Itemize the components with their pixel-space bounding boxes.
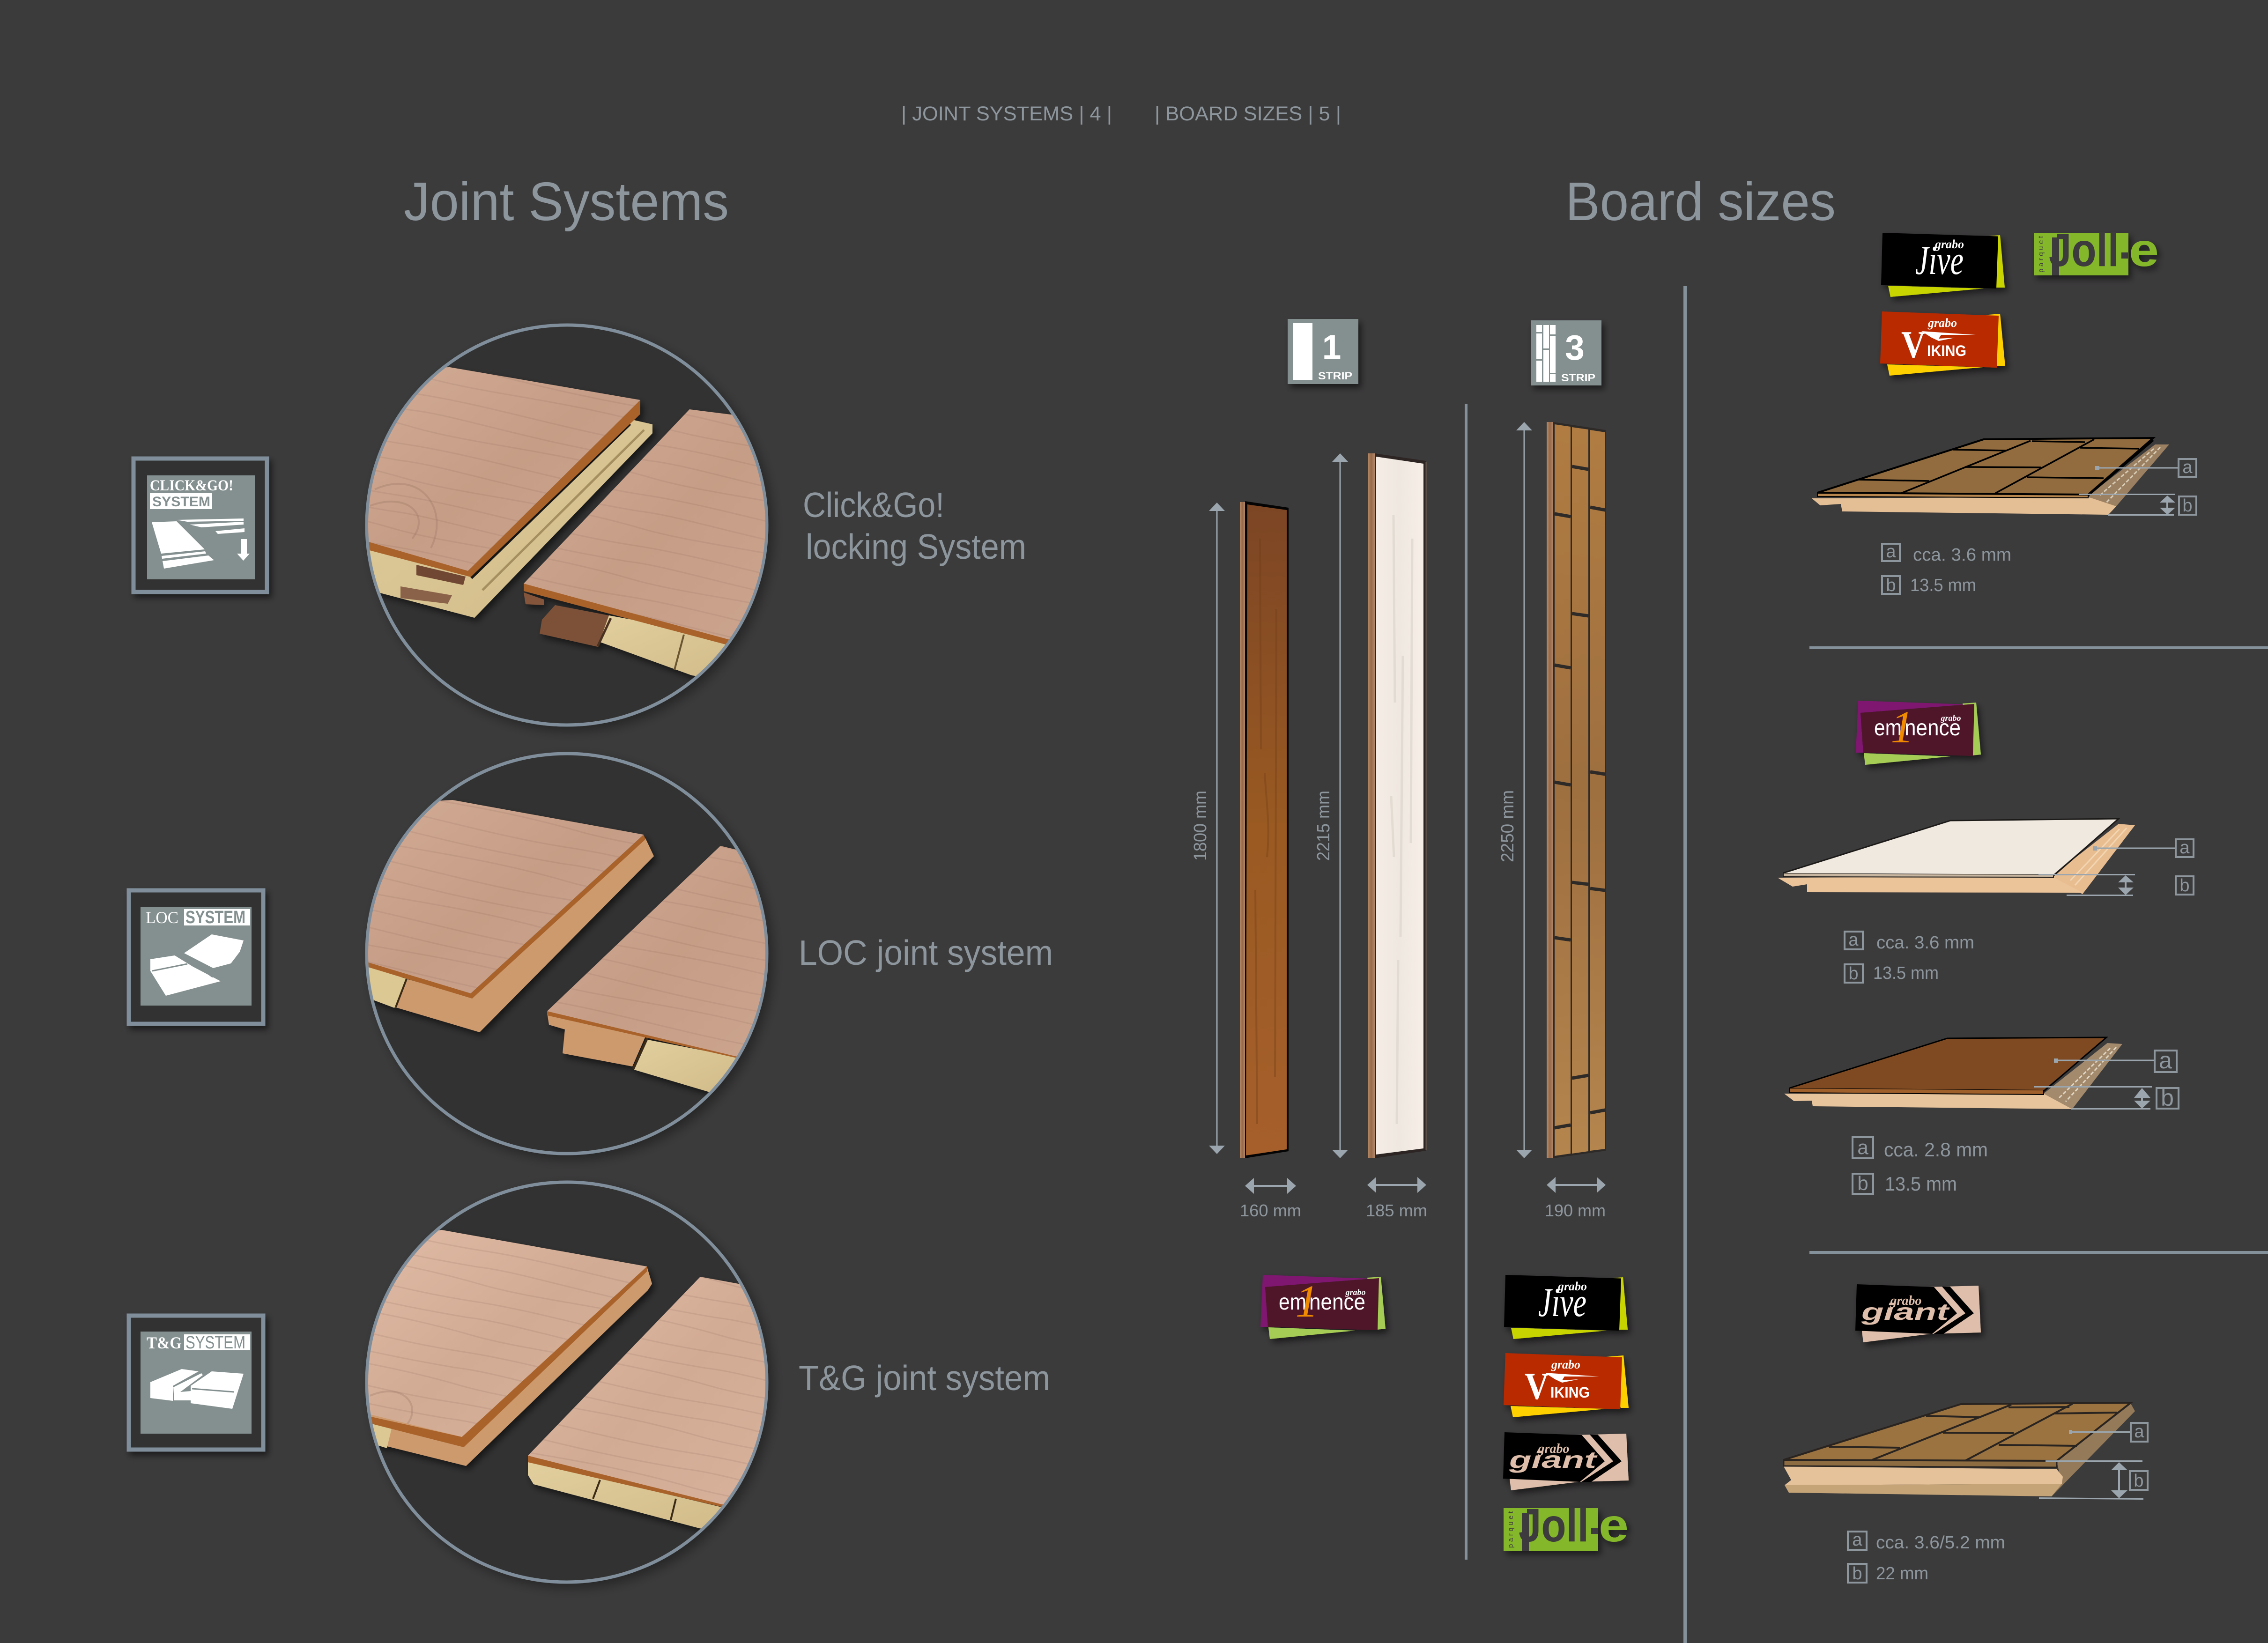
logo: eminence, strip column: 1 <box>1296 1276 1318 1327</box>
logo: Jive, thickness section: Jive <box>1915 238 1964 283</box>
callout a: white board surface: a <box>2179 838 2190 858</box>
logo: eminence, strip column <box>1260 1275 1386 1339</box>
header navigation <box>901 103 1341 125</box>
logo: eminence, strip column: grabo <box>1345 1288 1366 1297</box>
label: 1800 mm: 1800 mm <box>1191 791 1210 861</box>
callout a: dark board surface <box>2054 1047 2177 1073</box>
divider between strip columns <box>1465 404 1468 1560</box>
legend: 3-strip values: a <box>1886 542 1896 562</box>
title: Joint Systems: Joint Systems <box>404 171 729 232</box>
icon: 1 strip: STRIP <box>1318 370 1352 382</box>
label: 2215 mm: 2215 mm <box>1314 791 1334 861</box>
logo: Jive, strip column: Jive <box>1538 1280 1586 1325</box>
circle: LOC joint photo <box>361 754 787 1154</box>
icon: Click&Go system: CLICK&GO! <box>150 477 233 494</box>
label: 2250 mm: 2250 mm <box>1498 790 1518 862</box>
callout a: giant surface <box>2069 1422 2148 1442</box>
logo: jolle, strip column <box>1504 1499 1629 1552</box>
label: Click&Go locking System: locking System <box>806 527 1026 566</box>
legend: 3-strip values: 13.5 mm <box>1910 576 1976 595</box>
callout a: 3-strip surface <box>2095 458 2196 477</box>
arrow: 2250 mm height <box>1516 422 1532 1158</box>
legend: giant values: 22 mm <box>1876 1564 1928 1584</box>
logo: jolle, thickness section: e <box>2129 224 2159 276</box>
legend: dark board values: cca. 2.8 mm <box>1884 1139 1988 1161</box>
logo: eminence, thickness section <box>1856 701 1981 765</box>
legend: giant values: b <box>1852 1564 1862 1584</box>
right board of T&G joint <box>528 1277 787 1536</box>
label: 160 mm: 160 mm <box>1240 1201 1301 1220</box>
logo: Viking, thickness section <box>1880 311 2005 376</box>
left board of T&G joint <box>361 1230 652 1466</box>
callout b: 3-strip thickness: b <box>2182 496 2193 516</box>
logo: jolle, strip column: Joll <box>1519 1499 1589 1552</box>
callout b: 3-strip thickness <box>2079 494 2196 516</box>
logo: jolle, strip column: parquet <box>1507 1511 1515 1548</box>
logo: Viking, strip column <box>1504 1353 1629 1417</box>
header navigation: | BOARD SIZES | 5 | <box>1155 103 1341 125</box>
cross-section board: 3-strip 13.5 mm <box>1812 438 2169 515</box>
callout b: giant thickness <box>2039 1460 2148 1500</box>
legend: white board values: b <box>1848 964 1859 984</box>
logo: Jive, thickness section: grabo <box>1934 237 1964 251</box>
icon: LOC system: SYSTEM <box>185 908 245 927</box>
legend: dark board values: b <box>1857 1172 1868 1194</box>
logo: Jive, thickness section <box>1881 233 2005 297</box>
icon: T&G system: T&G <box>147 1333 182 1352</box>
icon: 3 strip <box>1531 320 1601 385</box>
arrow: 185 mm width <box>1367 1177 1426 1193</box>
board: 185 mm white <box>1368 453 1426 1158</box>
arrow: 160 mm width <box>1245 1178 1296 1194</box>
left board of Click&Go joint <box>361 367 652 618</box>
label: T&G joint system: T&G joint system <box>799 1358 1050 1398</box>
legend: white board values: cca. 3.6 mm <box>1876 933 1974 953</box>
legend: giant values <box>1848 1530 2005 1584</box>
logo: giant, strip column: giant <box>1508 1447 1598 1473</box>
arrow: 190 mm width <box>1547 1177 1606 1193</box>
logo: Viking, thickness section: V <box>1901 323 1926 366</box>
legend: giant values: cca. 3.6/5.2 mm <box>1876 1533 2005 1553</box>
cross-section board: dark 13.5 mm <box>1784 1037 2122 1109</box>
callout b: dark board thickness <box>2034 1085 2179 1111</box>
legend: giant values: a <box>1852 1530 1862 1550</box>
callout b: giant thickness: b <box>2134 1471 2144 1491</box>
left board of LOC joint <box>361 800 654 1032</box>
logo: eminence, thickness section: em <box>1874 716 1902 740</box>
legend: 3-strip values: cca. 3.6 mm <box>1913 545 2011 565</box>
callout a: dark board surface: a <box>2159 1047 2172 1073</box>
label: 185 mm: 185 mm <box>1366 1201 1427 1220</box>
logo: Viking, thickness section: grabo <box>1927 316 1957 330</box>
logo: eminence, strip column: nence <box>1309 1290 1365 1315</box>
icon: LOC system <box>129 890 263 1024</box>
circle: Click&Go joint photo <box>361 325 787 725</box>
logo: Viking, strip column: IKING <box>1550 1384 1590 1401</box>
logo: jolle, thickness section: Joll <box>2049 224 2119 276</box>
logo: giant, thickness section <box>1855 1284 1981 1342</box>
circle: T&G joint photo <box>361 1182 787 1582</box>
label: Click&Go locking System: Click&Go! <box>803 485 944 525</box>
callout a: white board surface <box>2093 838 2194 858</box>
label: Click&Go locking System <box>803 485 1026 566</box>
right board of Click&Go joint <box>524 409 787 684</box>
icon: Click&Go system <box>133 459 267 592</box>
icon: 1 strip <box>1288 319 1358 384</box>
legend: dark board values: 13.5 mm <box>1885 1173 1957 1195</box>
legend: dark board values: a <box>1857 1136 1868 1158</box>
legend: 3-strip values: b <box>1886 576 1896 595</box>
icon: T&G system: SYSTEM <box>185 1333 245 1353</box>
callout b: white board thickness <box>2038 874 2194 896</box>
logo: Viking, thickness section: IKING <box>1927 342 1966 359</box>
header navigation: | JOINT SYSTEMS | 4 | <box>901 103 1112 125</box>
legend: dark board values <box>1853 1136 1988 1195</box>
divider between strip area and thickness area <box>1683 286 1687 1643</box>
legend: white board values: 13.5 mm <box>1873 963 1939 983</box>
callout b: white board thickness: b <box>2179 876 2190 896</box>
icon: Click&Go system: SYSTEM <box>152 494 210 510</box>
logo: jolle, strip column: e <box>1599 1499 1629 1552</box>
logo: eminence, thickness section: 1 <box>1890 702 1914 753</box>
logo: eminence, thickness section: grabo <box>1940 713 1961 723</box>
logo: giant, strip column <box>1503 1432 1629 1490</box>
arrow: 2215 mm height <box>1332 453 1348 1158</box>
legend: white board values: a <box>1848 930 1859 950</box>
icon: LOC system: LOC <box>146 908 178 927</box>
label: 190 mm: 190 mm <box>1545 1201 1606 1220</box>
callout a: giant surface: a <box>2134 1422 2144 1442</box>
logo: Jive, strip column <box>1504 1275 1628 1339</box>
icon: 1 strip: 1 <box>1322 328 1341 366</box>
callout a: 3-strip surface: a <box>2182 458 2193 477</box>
icon: T&G system <box>129 1316 263 1450</box>
board: 190 mm three strip <box>1547 422 1606 1158</box>
logo: jolle, thickness section: parquet <box>2037 236 2045 273</box>
cross-section board: white 13.5 mm <box>1778 819 2135 894</box>
logo: Viking, strip column: V <box>1525 1365 1549 1407</box>
logo: giant, thickness section: giant <box>1860 1299 1950 1325</box>
logo: Jive, strip column: grabo <box>1557 1280 1587 1293</box>
callout b: dark board thickness: b <box>2161 1085 2174 1111</box>
cross-section board: giant 22 mm <box>1784 1403 2135 1496</box>
logo: eminence, thickness section: nence <box>1905 716 1961 740</box>
right board of LOC joint <box>547 846 787 1096</box>
divider: section 2 <box>1809 1251 2268 1254</box>
logo: giant, thickness section: grabo <box>1890 1294 1921 1308</box>
logo: giant, strip column: grabo <box>1538 1442 1569 1456</box>
logo: Viking, strip column: grabo <box>1551 1358 1580 1371</box>
legend: 3-strip values <box>1882 542 2011 595</box>
logo: jolle, thickness section <box>2034 224 2159 276</box>
logo: eminence, strip column: em <box>1279 1290 1306 1315</box>
label: LOC joint system: LOC joint system <box>799 933 1053 972</box>
icon: 3 strip: 3 <box>1565 328 1585 367</box>
title: Board sizes: Board sizes <box>1565 171 1836 232</box>
arrow: 1800 mm height <box>1209 503 1225 1154</box>
legend: white board values <box>1845 930 1974 984</box>
divider: section 1 <box>1809 646 2268 649</box>
board: 160 mm dark <box>1240 501 1289 1158</box>
icon: 3 strip: STRIP <box>1561 372 1595 384</box>
